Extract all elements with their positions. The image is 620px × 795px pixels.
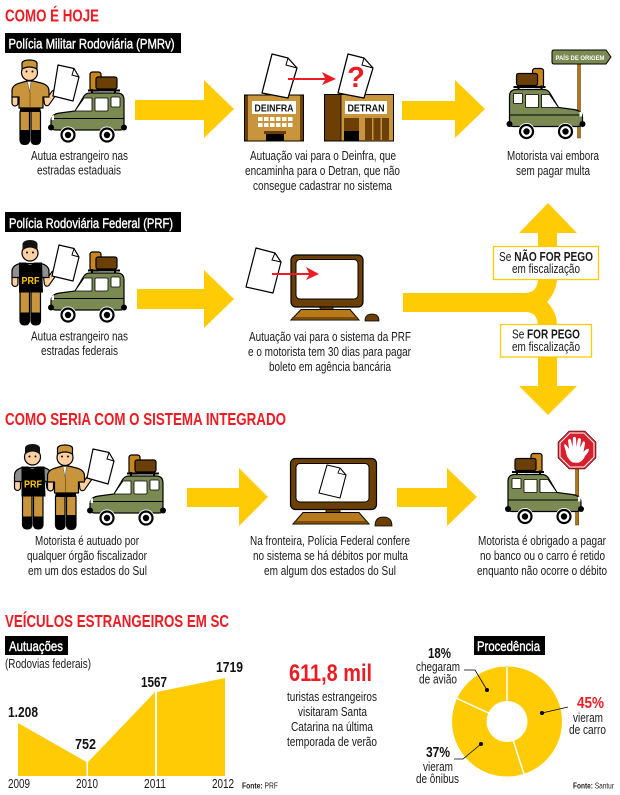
donut chart: procedência [452,666,568,776]
caption: motorista é obrigado [477,534,607,578]
caption: motorista é autuado: Motorista é autuado por [35,534,139,548]
label: 37% ônibus: de ônibus [416,772,459,786]
caption: autuação Deinfra: encaminha para o Detran, que não [245,164,400,178]
icon: car driving away [506,68,586,140]
label: 18% avião: chegaram [416,660,460,674]
heading bar: Polícia Rodoviária Federal: Polícia Rodoviária Federal (PRF) [9,215,173,231]
caption: autua estrangeiro estaduais [31,149,128,178]
icon: Deinfra building: DEINFRA [254,104,294,114]
icon: both officers with document and car [14,444,166,530]
label: 37% ônibus: vieram [423,760,453,774]
text block: turistas estrangeiros: turistas estrangeiros [287,690,377,704]
icon: sign post país de origem: PAÍS DE ORIGEM [556,53,604,62]
label: 37% ônibus [416,744,459,786]
caption: autuação Deinfra [245,149,400,193]
caption: autuação PRF: Autuação vai para o sistema da PRF [249,330,411,344]
title: como seria com o sistema integrado: COMO SERIA COM O SISTEMA INTEGRADO [5,409,286,429]
label: 45% carro [569,695,606,737]
arrow: row 3 first [187,468,268,526]
label: 18% avião [416,645,460,686]
icon: federal police officer with document and car: PRF [22,276,40,287]
label: 45% carro: de carro [569,723,606,737]
subtitle: rodovias federais: (Rodovias federais) [5,657,91,671]
icon: Detran building [324,94,394,141]
label: 18% avião: 18% [428,645,451,662]
caption: autua estrangeiro federais: estradas federais [41,344,118,358]
arrow: row 1 first [135,80,234,138]
caption: na fronteira: no sistema se há débitos por multa [253,549,408,563]
big number: 611,8 mil: 611,8 mil [289,660,372,687]
arrow: row 3 second [397,468,477,526]
area chart: autuações by year: 2010 [76,777,98,791]
caption: autua estrangeiro estaduais: estradas estaduais [37,164,121,178]
caption: motorista é autuado [27,534,147,578]
caption: autua estrangeiro estaduais: Autua estrangeiro nas [31,149,128,163]
icon: both officers with document and car: PRF [24,480,42,490]
area chart: autuações by year: 2012 [212,777,234,791]
icon: Deinfra building [244,95,304,141]
heading bar: Polícia Militar Rodoviária [5,33,181,53]
area chart: autuações by year: 1.208 [8,704,38,721]
area chart: autuações by year: 752 [75,736,96,753]
arrow: row 2 first [137,270,234,328]
caption: motorista vai embora: sem pagar multa [516,164,590,178]
title: como é hoje: COMO É HOJE [5,4,99,26]
caption: na fronteira: em algum dos estados do Sul [264,564,396,578]
callout: se for pego [500,324,592,357]
title: veículos estrangeiros em SC: VEÍCULOS ESTRANGEIROS EM SC [5,610,229,631]
icon: computer with document [246,248,379,321]
caption: autuação PRF [248,330,411,374]
callout: se não for pego [494,246,598,280]
caption: na fronteira: Na fronteira, Polícia Federal confere [250,534,410,548]
text block: turistas estrangeiros: visitaram Santa [298,705,367,719]
icon: stop sign with hand [558,431,596,525]
callout: se não for pego: Se NÃO FOR PEGO [499,249,593,264]
caption: autua estrangeiro federais [31,330,128,358]
label: 37% ônibus: 37% [426,744,450,761]
area chart: autuações by year: 1719 [216,659,243,676]
arrow: row 1 second [402,80,485,138]
caption: motorista é autuado: qualquer órgão fiscalizador [27,549,147,563]
caption: autuação PRF: e o motorista tem 30 dias para pagar [248,345,411,359]
label: 18% avião: de avião [419,672,457,686]
text block: turistas estrangeiros: Catarina na última [291,720,373,734]
icon: document to Deinfra [262,54,297,98]
area chart: autuações by year [8,659,243,791]
area chart: autuações by year: 2011 [144,777,166,791]
icon: computer at border [290,458,392,526]
area chart: autuações by year: 2009 [8,777,30,791]
heading bar: Polícia Rodoviária Federal [5,212,181,232]
caption: autuação PRF: boleto em agência bancária [269,360,391,374]
label: 45% carro: 45% [577,695,604,712]
caption: autuação Deinfra: consegue cadastrar no sistema [253,179,392,193]
icon: military police officer with document and car [12,60,127,145]
label: 45% carro: vieram [573,711,603,725]
icon: document with question mark [338,54,373,98]
callout: se não for pego: em fiscalização [512,262,580,276]
arrow: red transfer [288,72,336,85]
icon: car stopped [505,454,584,525]
callout: se for pego: Se FOR PEGO [512,328,580,342]
heading bar: Autuações: Autuações [9,638,63,654]
icon: federal police officer with document and car [12,240,127,326]
caption: motorista é autuado: em um dos estados do Sul [28,564,147,578]
icon: sign post país de origem [552,50,611,138]
caption: autuação Deinfra: Autuação vai para o Deinfra, que [250,149,396,163]
text block: turistas estrangeiros [287,690,377,749]
caption: motorista vai embora [507,149,599,178]
source: Santur: Fonte: Santur [573,780,614,790]
heading bar: Polícia Militar Rodoviária: Polícia Militar Rodoviária (PMRv) [8,36,174,52]
heading bar: Procedência: Procedência [477,638,540,654]
source: PRF: Fonte: PRF [242,780,278,790]
caption: na fronteira [250,534,410,578]
caption: autua estrangeiro federais: Autua estrangeiro nas [31,330,128,344]
area chart: autuações by year: 1567 [141,674,167,691]
text block: turistas estrangeiros: temporada de verão [287,735,377,749]
icon: Detran building: DETRAN [348,104,384,114]
arrow: branching decision [403,203,577,415]
icon: document with question mark: ? [347,62,365,94]
callout: se for pego: em fiscalização [512,340,580,354]
